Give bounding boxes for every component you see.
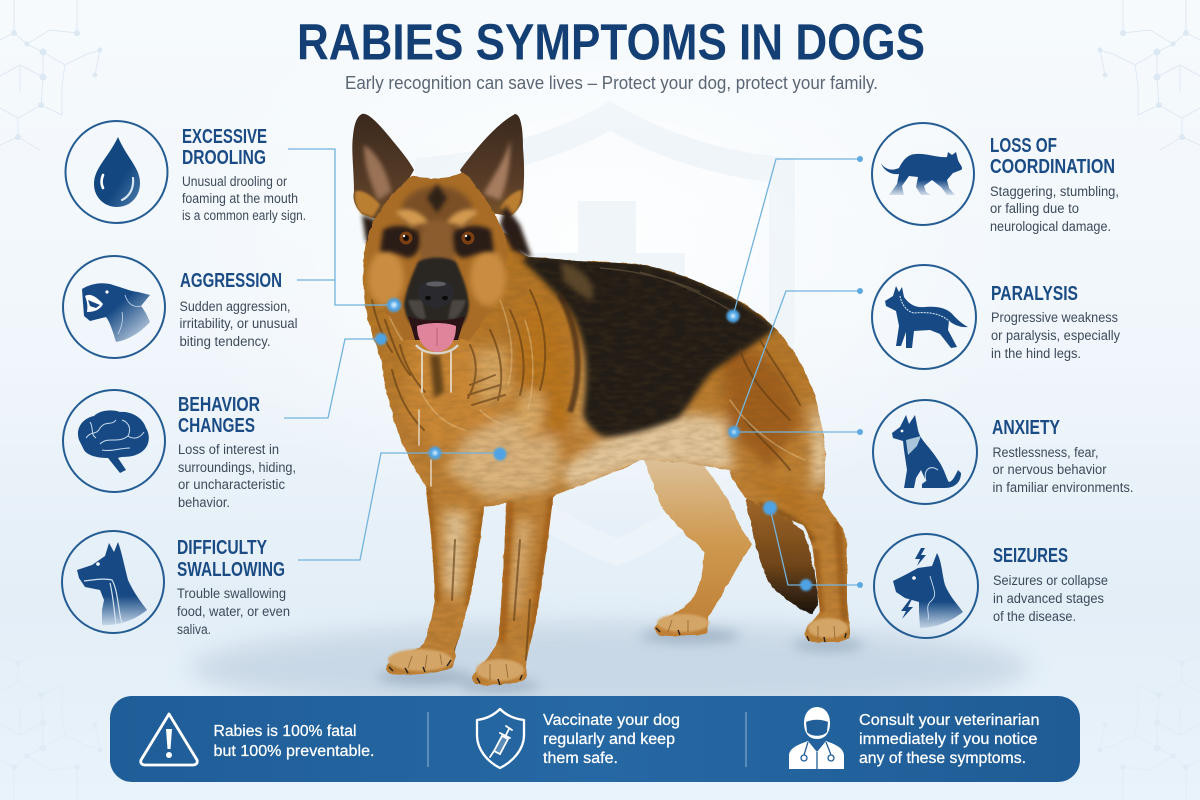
heading: DIFFICULTY	[177, 537, 268, 559]
icon: shield with syringe	[477, 709, 524, 768]
ear left	[352, 114, 414, 222]
description: biting tendency.	[180, 334, 270, 349]
consult message: Consult your veterinarian	[859, 712, 1040, 729]
watermark shield	[428, 116, 782, 552]
vaccinate message: them safe.	[543, 750, 618, 767]
heading: SWALLOWING	[177, 559, 285, 581]
drool	[419, 352, 451, 486]
consult message: any of these symptoms.	[859, 750, 1026, 767]
heading: LOSS OF	[990, 135, 1057, 157]
heading: BEHAVIOR	[178, 394, 260, 416]
heading	[178, 394, 260, 437]
icon: dog head with lightning	[874, 534, 978, 638]
title: RABIES SYMPTOMS IN DOGS	[297, 14, 925, 70]
heading: AGGRESSION	[180, 270, 282, 292]
dark neck patches	[362, 205, 532, 258]
panel: seizures	[874, 534, 1108, 638]
description: Restlessness, fear,	[992, 445, 1098, 460]
description: surroundings, hiding,	[178, 460, 296, 475]
warning message	[214, 723, 374, 760]
description	[990, 184, 1119, 234]
vaccinate message: regularly and keep	[543, 731, 675, 748]
description: behavior.	[178, 495, 230, 510]
black saddle	[522, 254, 776, 437]
heading	[182, 126, 267, 169]
panel: paralysis	[872, 265, 1120, 369]
far hind leg	[644, 460, 752, 636]
panel: bottom banner	[110, 696, 1080, 782]
icon: stumbling dog	[872, 123, 974, 225]
icon: dog throat	[62, 531, 164, 633]
ear right	[460, 114, 524, 216]
icon: warning triangle	[141, 714, 197, 765]
description: Unusual drooling or	[182, 174, 287, 189]
icon: water drop	[66, 121, 168, 223]
description	[991, 310, 1120, 361]
subtitle: Early recognition can save lives – Protect your dog, protect your family.	[345, 73, 878, 93]
panel: behavior changes	[63, 390, 296, 510]
heading: PARALYSIS	[991, 283, 1078, 305]
description: is a common early sign.	[182, 208, 306, 223]
heading: DROOLING	[182, 147, 266, 169]
description: or falling due to	[990, 201, 1079, 216]
illustration: german shepherd	[352, 114, 864, 692]
coat shading	[363, 248, 850, 684]
icon: brain	[63, 390, 165, 492]
description	[993, 573, 1108, 624]
consult message: immediately if you notice	[859, 731, 1038, 748]
warning message: Rabies is 100% fatal	[214, 723, 356, 740]
description: Progressive weakness	[991, 310, 1118, 325]
description: or uncharacteristic	[178, 477, 285, 492]
icon: sitting dog	[873, 400, 977, 504]
heading: SEIZURES	[993, 545, 1068, 567]
description: in familiar environments.	[992, 480, 1134, 495]
heading: CHANGES	[178, 415, 255, 437]
icon: dog with spine	[872, 265, 976, 369]
icon: snarling dog	[63, 256, 165, 358]
icon: veterinarian	[789, 707, 844, 769]
heading: COORDINATION	[990, 156, 1115, 178]
consult message	[859, 712, 1040, 767]
description	[992, 445, 1134, 495]
panel: difficulty swallowing	[62, 531, 290, 637]
paws	[388, 614, 848, 681]
description: food, water, or even	[177, 604, 290, 619]
body	[363, 200, 850, 685]
eyes	[400, 232, 474, 244]
description: in advanced stages	[993, 591, 1104, 606]
fur texture	[363, 248, 850, 684]
panel: loss of coordination	[872, 123, 1119, 234]
panel: excessive drooling	[66, 121, 306, 223]
description: irritability, or unusual	[180, 316, 298, 331]
description: Loss of interest in	[178, 442, 279, 457]
description: of the disease.	[993, 609, 1076, 624]
heading: EXCESSIVE	[182, 126, 267, 148]
marker dots	[375, 156, 863, 591]
description: foaming at the mouth	[182, 191, 298, 206]
neck stripes and fur strands	[560, 295, 578, 412]
vaccinate message: Vaccinate your dog	[543, 712, 680, 729]
heading: ANXIETY	[992, 417, 1061, 439]
panel: anxiety	[873, 400, 1134, 504]
heading	[177, 537, 285, 581]
description: neurological damage.	[990, 219, 1111, 234]
panel: aggression	[63, 256, 298, 358]
description: Sudden aggression,	[180, 299, 290, 314]
description: in the hind legs.	[991, 346, 1081, 361]
warning message: but 100% preventable.	[214, 743, 374, 760]
vaccinate message	[543, 712, 680, 767]
connector lines	[284, 149, 860, 585]
description	[180, 299, 298, 349]
face markings	[368, 184, 506, 306]
description: saliva.	[177, 622, 211, 637]
description: Staggering, stumbling,	[990, 184, 1119, 199]
description: or paralysis, especially	[991, 328, 1120, 343]
mouth and tongue	[408, 316, 465, 353]
description: or nervous behavior	[992, 462, 1107, 477]
description: Trouble swallowing	[177, 586, 286, 601]
description	[182, 174, 306, 223]
description	[178, 442, 296, 510]
description: Seizures or collapse	[993, 573, 1108, 588]
description	[177, 586, 290, 637]
ground shadow	[377, 629, 864, 692]
heading	[990, 135, 1115, 178]
nose	[418, 280, 454, 309]
head	[366, 172, 507, 340]
tail	[747, 490, 818, 615]
muzzle	[404, 258, 469, 334]
